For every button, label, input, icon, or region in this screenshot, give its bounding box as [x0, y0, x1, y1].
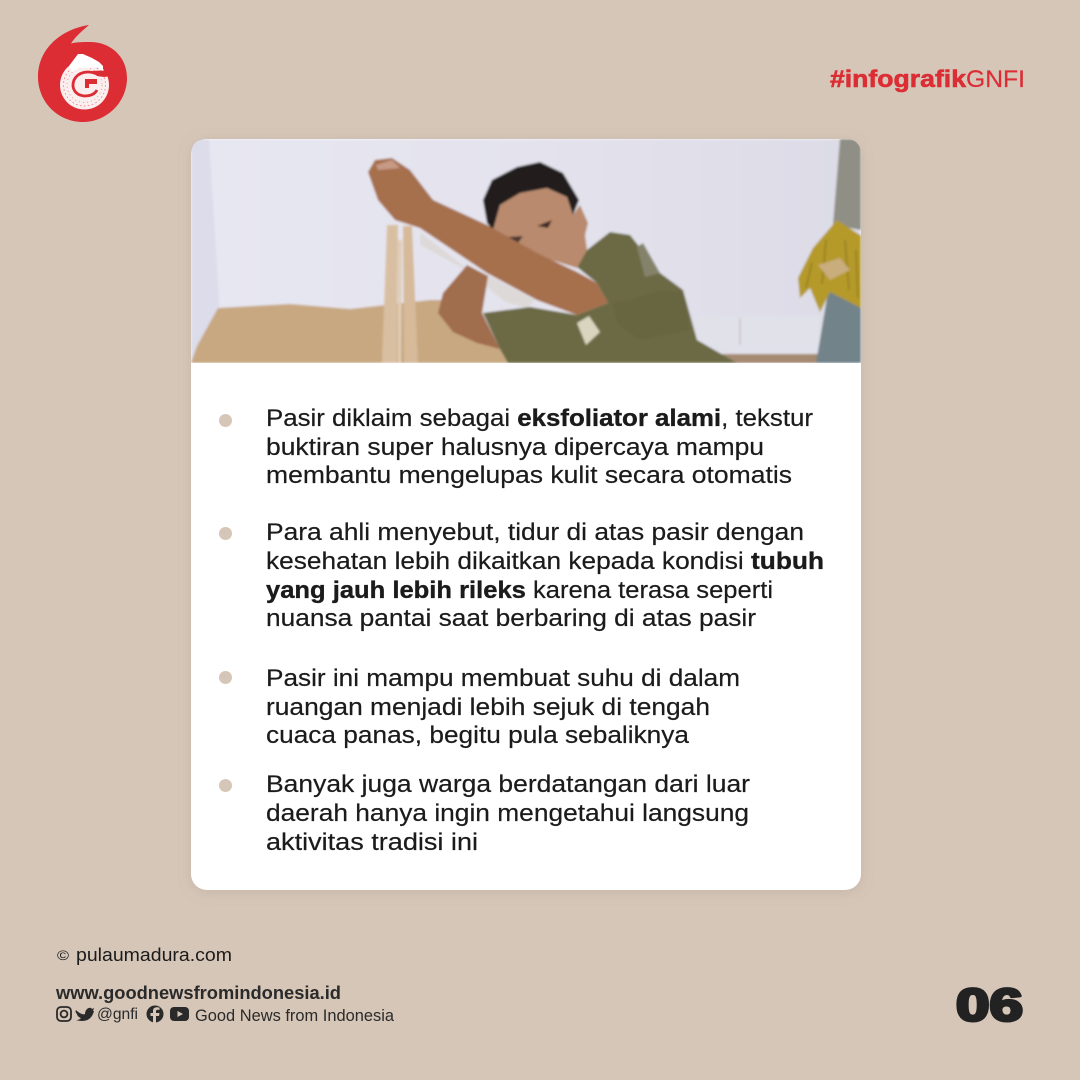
bullet 1: Pasir diklaim sebagai eksfoliator alami , tekstur [266, 405, 813, 432]
bullet 4: aktivitas tradisi ini [266, 829, 478, 856]
bullet 4 [219, 771, 750, 856]
bullet 2: kesehatan lebih dikaitkan kepada kondisi tubuh [266, 548, 824, 575]
bullet 2 [219, 519, 824, 632]
source credit: pulaumadura.com [76, 945, 232, 965]
handle: @gnfi [97, 1006, 138, 1023]
source credit: © [57, 947, 70, 963]
icon: facebook [146, 1006, 164, 1023]
bullet 3: ruangan menjadi lebih sejuk di tengah [266, 694, 710, 721]
bullet 2: Para ahli menyebut, tidur di atas pasir dengan [266, 519, 804, 546]
card background [191, 139, 861, 890]
bullet 4: daerah hanya ingin mengetahui langsung [266, 800, 749, 827]
page number: 06 [956, 980, 1023, 1030]
bullet 3: cuaca panas, begitu pula sebaliknya [266, 722, 690, 749]
social row [57, 1006, 395, 1025]
bullet 2: yang jauh lebih rileks karena terasa seperti [266, 577, 773, 604]
logo: GNFI red six with garuda G [38, 25, 127, 122]
icon: youtube [170, 1007, 189, 1021]
panel: content card [191, 139, 861, 890]
icon: twitter [76, 1008, 94, 1021]
brand name: Good News from Indonesia [195, 1006, 395, 1025]
website url: www.goodnewsfromindonesia.id [55, 983, 341, 1003]
hashtag: #infografik [830, 66, 966, 93]
bullet 3: Pasir ini mampu membuat suhu di dalam [266, 665, 740, 692]
icon: instagram [57, 1007, 71, 1021]
bullet 3 [219, 665, 740, 749]
bullet 4: Banyak juga warga berdatangan dari luar [266, 771, 750, 798]
bullet 1 [219, 405, 813, 489]
bullet 2: nuansa pantai saat berbaring di atas pasir [266, 605, 756, 632]
hashtag suffix: GNFI [966, 66, 1025, 93]
bullet 1: buktiran super halusnya dipercaya mampu [266, 434, 764, 461]
photo: man lying on sand [191, 139, 861, 363]
bullet 1: membantu mengelupas kulit secara otomatis [266, 462, 792, 489]
